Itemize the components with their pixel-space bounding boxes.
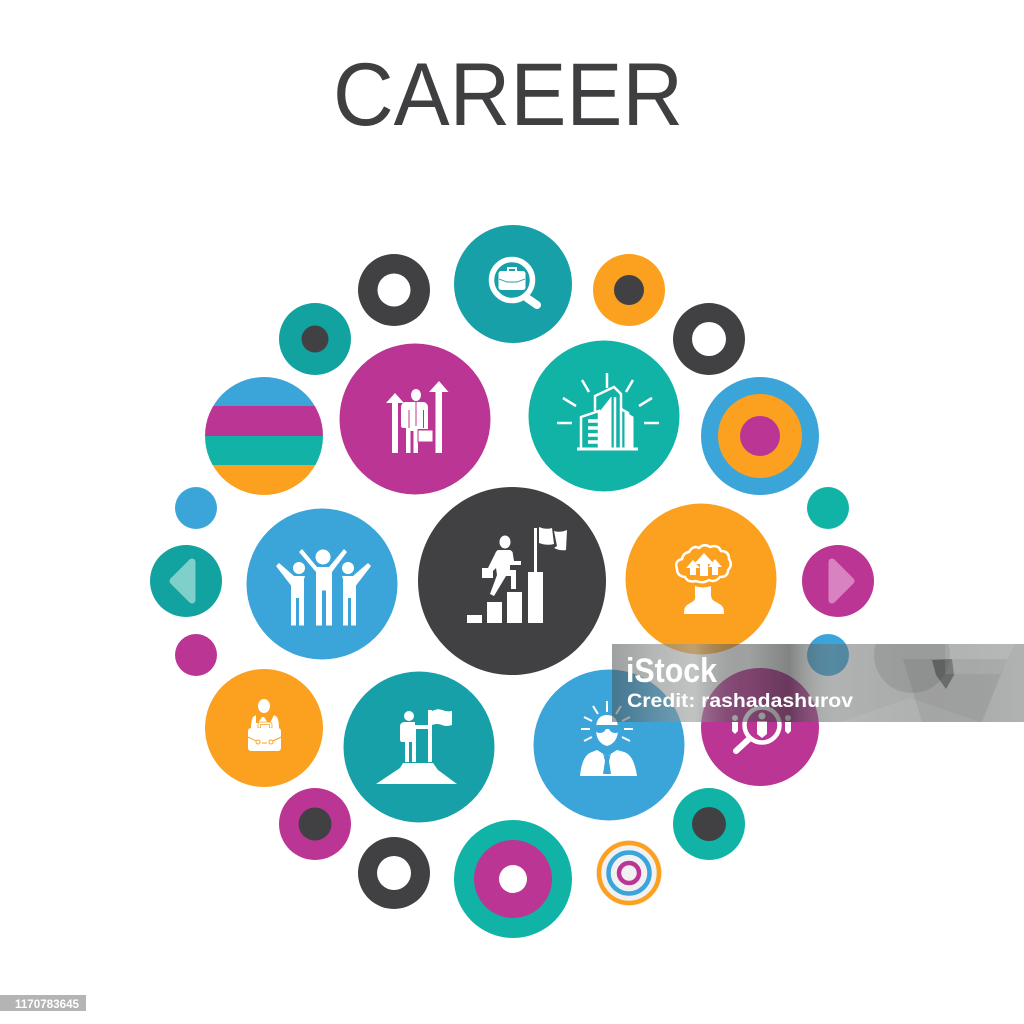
decorative ring: magenta lower left [279,788,351,860]
panel: job search [454,225,572,343]
icon: man with flag on a hill [376,709,457,784]
panel: striped segment [205,377,323,495]
icon: businessman between arrows [386,381,448,453]
icon: man climbing steps to flag [467,527,567,623]
panel: talent search [701,668,819,786]
dot: teal right [807,487,849,529]
decorative ring: dark top left [358,254,430,326]
title: CAREER [333,44,683,144]
icon: three people cheering [276,549,371,626]
icon: person behind briefcase [248,699,281,751]
watermark logo: iStock [626,652,717,690]
icon: head with arrows in cloud [676,545,731,614]
icon: magnifier over people [732,708,791,751]
dot: blue right [807,634,849,676]
panel: company [528,340,680,492]
icon: man with sunglasses [580,701,637,776]
panel: reaching the goal [418,487,606,675]
watermark credit: Credit: rashadashurov [627,691,853,712]
watermark band [612,644,1024,722]
arrow: next [802,545,874,617]
decorative ring: dark lower left [358,837,430,909]
arrow: previous [150,545,222,617]
icon: briefcase magnifier [492,260,537,305]
decorative ring: teal upper left [279,303,351,375]
decorative ring: teal lower right [673,788,745,860]
decorative ring: dark upper right [673,303,745,375]
decorative ring: teal bottom [454,820,572,938]
panel: achievement [344,672,494,822]
dot: blue left [175,487,217,529]
decorative ring: orange top right [593,254,665,326]
panel: career growth [340,344,490,494]
decorative ring: target bottom [596,840,662,906]
image id tag [0,995,86,1011]
decorative ring: concentric upper right [701,377,819,495]
panel: teamwork [246,508,398,660]
dot: magenta left [175,634,217,676]
icon: building with rays [557,373,659,449]
panel: career mindset [626,504,776,654]
panel: employee [205,669,323,787]
image id tag: 1170783645 [15,997,79,1011]
panel: confident leader [534,670,684,820]
